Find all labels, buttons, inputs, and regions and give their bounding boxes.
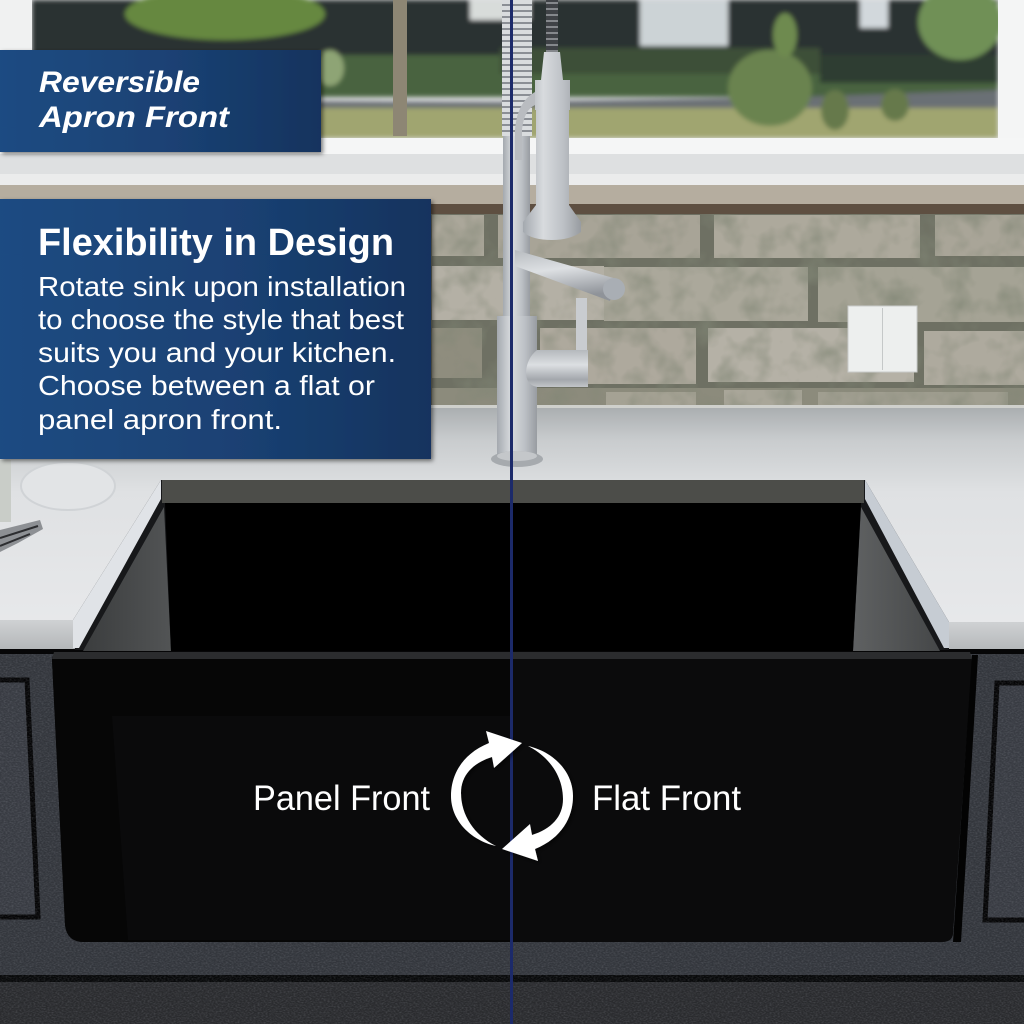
counter back edge — [430, 405, 1024, 408]
body text: suits you and your kitchen. — [38, 337, 396, 368]
body text: to choose the style that best — [38, 304, 404, 335]
coil spring — [502, 0, 532, 136]
sink rim — [162, 480, 864, 503]
countertop — [0, 406, 1024, 652]
riser — [503, 136, 530, 316]
handle — [526, 350, 588, 387]
banner: Reversible Apron Front: Reversible — [39, 66, 200, 99]
brick wall — [430, 214, 1024, 406]
cut-out side edges — [73, 480, 161, 648]
cabinets — [0, 650, 1024, 1024]
hose — [546, 0, 558, 52]
banner: Reversible Apron Front — [0, 50, 321, 152]
body text: Choose between a flat or — [38, 370, 375, 401]
sink basin — [165, 503, 861, 651]
glass — [0, 460, 115, 552]
cabinet panel right — [985, 683, 1024, 920]
counter front edges — [0, 620, 1024, 654]
panel: Flexibility in Design — [0, 199, 431, 459]
icon: rotate arrows — [451, 731, 573, 861]
base — [491, 451, 543, 467]
banner: Reversible Apron Front: Apron Front — [38, 101, 231, 134]
plinth — [0, 982, 1024, 1024]
body text — [38, 271, 406, 435]
basin right wall — [853, 507, 940, 651]
body — [497, 316, 537, 456]
window view — [32, 0, 1002, 138]
counter cut-out — [73, 480, 949, 650]
apron top edge — [52, 652, 972, 659]
apron panel recess — [112, 716, 510, 940]
apron front — [52, 652, 972, 942]
spout — [515, 250, 617, 301]
basin left wall — [83, 507, 171, 651]
wood sill — [0, 185, 1024, 215]
body text: Rotate sink upon installation — [38, 271, 406, 302]
apron gap — [953, 655, 978, 942]
body text: panel apron front. — [38, 404, 282, 435]
center divider line — [510, 0, 513, 1024]
window frame — [0, 0, 1024, 185]
brick mottling — [430, 214, 1024, 406]
label: Flat Front: Flat Front — [592, 779, 741, 818]
label: Panel Front: Panel Front — [253, 779, 430, 818]
lever — [576, 298, 587, 350]
sink — [52, 480, 978, 942]
arch — [515, 92, 535, 160]
wall switch — [848, 306, 917, 372]
cabinet panel left — [0, 680, 38, 917]
pull head — [523, 52, 581, 240]
faucet — [491, 0, 625, 467]
heading: Flexibility in Design — [38, 222, 394, 264]
